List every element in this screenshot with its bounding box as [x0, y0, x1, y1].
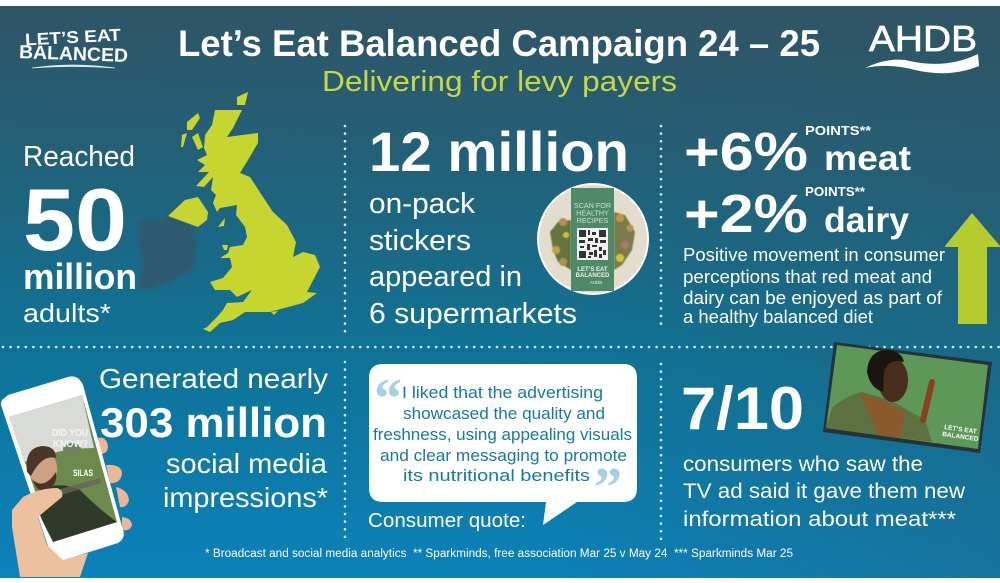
impressions label — [163, 448, 328, 513]
logo: Let's Eat Balanced: BALANCED — [19, 42, 128, 67]
stickers description: stickers — [369, 225, 471, 257]
impressions label: social media — [166, 448, 327, 479]
stickers description — [369, 188, 577, 330]
quote text: its nutritional benefits — [403, 467, 590, 485]
plus 6 percent meat: POINTS** — [805, 123, 872, 138]
plus 6 percent meat: +6% — [684, 122, 808, 182]
perceptions description — [683, 244, 945, 327]
TV ad description — [683, 453, 966, 531]
TV ad description: consumers who saw the — [683, 453, 923, 476]
303 million figure: 303 million — [100, 399, 327, 446]
panel: reach — [23, 92, 320, 332]
icon: closing quote mark: ” — [594, 457, 622, 519]
plus 2 percent dairy: +2% — [684, 184, 808, 244]
stickers description: appeared in — [369, 261, 522, 293]
TV ad still — [823, 342, 992, 453]
panel: on-pack stickers — [369, 120, 649, 330]
plus 6 percent meat: meat — [824, 139, 911, 178]
perceptions description: perceptions that red meat and — [683, 266, 932, 287]
sticker on salad plate: AHDB — [590, 280, 602, 285]
quote text — [373, 384, 632, 485]
sticker on salad plate — [537, 183, 649, 295]
impressions label: impressions* — [163, 482, 328, 513]
quote text: I liked that the advertising — [402, 384, 603, 402]
title: Let’s Eat Balanced Campaign 24 – 25 — [178, 23, 820, 64]
plus 2 percent dairy: POINTS** — [805, 184, 866, 199]
logo: AHDB — [865, 18, 979, 73]
quote text: showcased the quality and — [403, 405, 605, 423]
TV ad description: information about meat*** — [683, 508, 956, 531]
50 figure: 50 — [23, 170, 127, 269]
icon: up arrow — [945, 213, 1000, 324]
quote text: freshness, using appealing visuals — [373, 426, 632, 444]
footnotes: * Broadcast and social media analytics ** Sparkminds, free association Mar 25 v May 24 *** Sparkminds Mar 25 — [205, 548, 793, 560]
panel: TV ad — [681, 342, 992, 531]
7 out of 10 figure: 7/10 — [681, 375, 804, 442]
stickers description: on-pack — [369, 188, 476, 220]
perceptions description: Positive movement in consumer — [683, 244, 945, 265]
TV ad description: TV ad said it gave them new — [683, 480, 966, 503]
sticker on salad plate: RECIPES — [577, 216, 608, 225]
TV ad still: BALANCED — [942, 431, 979, 443]
quote attribution: Consumer quote: — [368, 510, 526, 532]
phone in hand: SILAS — [73, 468, 93, 478]
logo: Let's Eat Balanced: LET’S EAT — [25, 25, 122, 49]
speech bubble — [369, 364, 637, 525]
logo: Let's Eat Balanced — [19, 25, 128, 68]
generated label: Generated nearly — [99, 363, 328, 394]
quote text: and clear messaging to promote — [380, 447, 627, 465]
subtitle: Delivering for levy payers — [322, 66, 677, 98]
panel: consumer perceptions — [683, 122, 1000, 327]
sticker on salad plate: BALANCED — [576, 273, 610, 279]
perceptions description: dairy can be enjoyed as part of — [683, 287, 943, 308]
panel: consumer quote — [368, 364, 637, 532]
map of UK and Ireland — [138, 92, 320, 332]
sticker on salad plate: HEALTHY — [576, 208, 609, 218]
panel: social media — [1, 363, 328, 577]
phone in hand: KNOW? — [53, 439, 88, 450]
million: million — [23, 256, 137, 297]
stickers description: 6 supermarkets — [369, 298, 577, 330]
sticker on salad plate: SCAN FOR — [574, 201, 611, 210]
sticker on salad plate: LET’S EAT — [577, 267, 608, 273]
phone in hand — [1, 376, 132, 577]
adults: adults* — [23, 298, 111, 328]
reached label: Reached — [23, 141, 135, 173]
plus 6 percent meat — [684, 122, 911, 182]
logo: AHDB: AHDB — [869, 18, 977, 59]
phone in hand: DID YOU — [52, 428, 88, 439]
perceptions description: a healthy balanced diet — [683, 306, 873, 327]
12 million figure: 12 million — [369, 120, 629, 183]
plus 2 percent dairy — [684, 184, 910, 244]
TV ad still: LET’S EAT — [944, 424, 977, 436]
plus 2 percent dairy: dairy — [824, 201, 910, 240]
icon: opening quote mark: “ — [374, 368, 402, 430]
